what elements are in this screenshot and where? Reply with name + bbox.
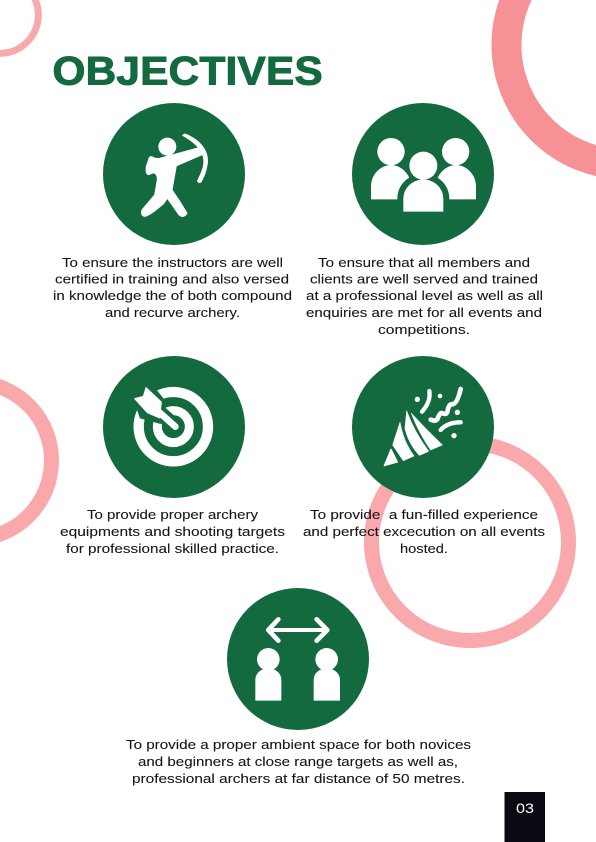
icon: party popper <box>352 356 494 498</box>
text: ambient space objective: professional archers at far distance of 50 metres. <box>132 771 465 786</box>
text: equipment objective: equipments and shooting targets <box>60 524 286 539</box>
text: instructors objective: and recurve archery. <box>105 305 240 320</box>
decorative ring: top left <box>0 0 38 53</box>
text: instructors objective <box>53 255 292 320</box>
icon: group of people <box>352 103 494 245</box>
text: equipment objective: To provide proper archery <box>87 507 259 522</box>
text: events objective: and perfect excecution on all events <box>303 524 546 539</box>
text: events objective <box>303 507 546 556</box>
text: members objective: at a professional level as well as all <box>306 288 543 303</box>
text: instructors objective: To ensure the instructors are well <box>62 255 283 270</box>
decorative ring: top right <box>506 0 596 164</box>
text: events objective: To provide a fun-filled experience <box>310 507 538 522</box>
text: members objective: competitions. <box>378 322 470 337</box>
decorative ring: middle right <box>372 444 568 640</box>
icon: archer <box>103 103 245 245</box>
text: instructors objective: certified in training and also versed <box>55 272 289 286</box>
decorative ring: middle left <box>0 382 52 539</box>
text: members objective: clients are well served and trained <box>310 272 538 286</box>
text: equipment objective: for professional skilled practice. <box>66 541 279 556</box>
text: members objective <box>306 255 543 337</box>
text: ambient space objective <box>126 737 472 786</box>
text: members objective: enquiries are met for all events and <box>306 305 542 320</box>
icon: target with arrow <box>103 356 245 498</box>
text: ambient space objective: To provide a proper ambient space for both novices <box>126 737 472 752</box>
title: OBJECTIVES <box>52 49 323 93</box>
text: members objective: To ensure that all members and <box>318 255 530 270</box>
text: ambient space objective: and beginners at close range targets as well as, <box>138 754 458 769</box>
text: instructors objective: in knowledge the of both compound <box>53 288 292 303</box>
text: events objective: hosted. <box>400 541 448 556</box>
text: equipment objective <box>60 507 286 556</box>
page number: 03 <box>516 800 534 816</box>
icon: two people with distance arrow <box>227 588 369 730</box>
page number <box>504 792 545 842</box>
